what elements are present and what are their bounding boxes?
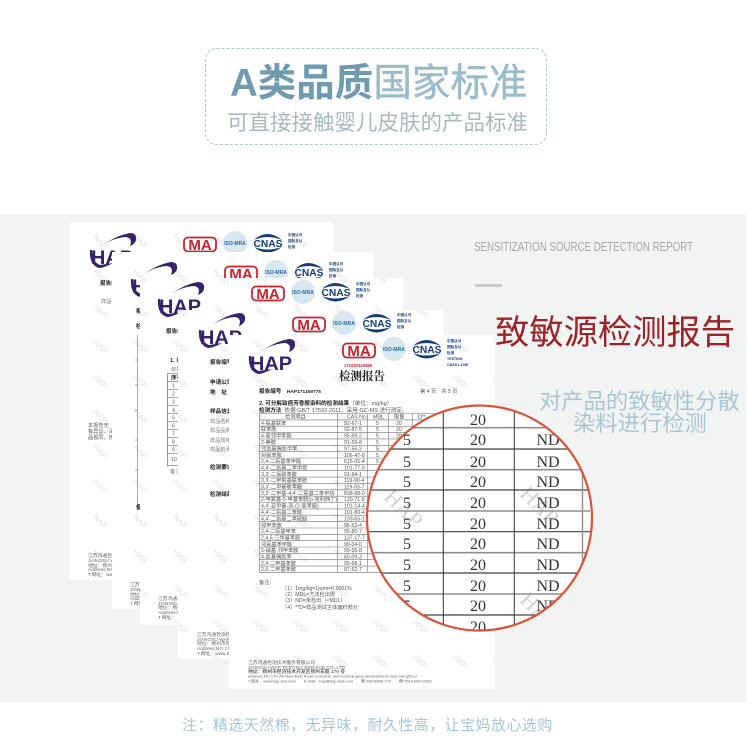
sheet 3 logos: MA [256, 286, 280, 303]
subtitle: 可直接接触婴儿皮肤的产品标准 [227, 111, 528, 135]
header badge [206, 48, 546, 144]
test results table: 3,3'-二甲基-4,4'-二氨基二苯甲烷 [261, 489, 335, 497]
test results table: 2,4-二甲基苯胺 [261, 559, 296, 567]
sheet 1 footer: 地址：扬州市经济技术 [88, 562, 136, 569]
sheet 3 narrow sample table: 9 [172, 448, 175, 454]
sheet 1 logos [90, 231, 303, 269]
magnified watermarks: HAP [515, 481, 564, 530]
sheet 4 footer [197, 631, 264, 657]
test results table: 101-80-4 [344, 510, 365, 516]
magnified grid lines [368, 412, 590, 624]
sheet 4 field labels: 申请公司 [210, 378, 233, 386]
column of results ND: ND [536, 516, 560, 533]
test results table: 5 [376, 453, 379, 459]
test results table: 20 [396, 434, 402, 440]
magnified watermarks [384, 486, 558, 614]
sheet 2 logos: 国际互认 [329, 267, 344, 272]
sheet 3 narrow sample table: 8 [172, 440, 175, 446]
sheet 5 footer: 地址：扬州市经济技术开发区扬州东路 170 号 [248, 668, 345, 675]
sheet 3 narrow sample table: 5 [172, 416, 175, 422]
table notes: （1）1mg/kg=1ppm=0.0001% [282, 585, 352, 592]
test results table: 3,3'-二甲氧基联苯胺 [261, 476, 307, 484]
sheet 1 side text: 样品名称 [101, 297, 122, 305]
sheet 3 logos: 国际互认 [356, 287, 371, 292]
sheet 2 logos [131, 260, 344, 298]
test results table: 91-59-8 [344, 440, 362, 446]
sheet 2 footer [130, 581, 197, 607]
column of limit values 20: 20 [470, 454, 486, 471]
test results table: MDL [373, 414, 384, 420]
sheet 1 logos: 中国认可 [288, 232, 303, 237]
column of results ND: ND [536, 557, 560, 574]
sheet 3 narrow sample table: 序号 [171, 374, 183, 382]
magnifier ring [367, 406, 592, 630]
column of limit values 5 [404, 434, 410, 602]
test results table: 101-77-9 [344, 466, 365, 472]
bottom note: 注：精选天然棉，无异味，耐久性高，让宝妈放心选购 [182, 717, 553, 734]
short accent bar [475, 284, 502, 287]
test results table: 邻氨基偶氮甲苯 [261, 444, 297, 452]
sheet 5 logos: ISO-MRA [383, 347, 405, 353]
sheet 2 footer: T.网址： [130, 600, 148, 607]
column of results ND: ND [536, 495, 560, 512]
test results table: CAS No. [347, 414, 367, 420]
sheet 1 logos: ISO-MRA [224, 241, 246, 247]
table notes: （4）**D=样品测试主体面料部分 [282, 603, 358, 611]
sheet 1 side text: 品视同，核 [88, 433, 114, 441]
sheet 3 narrow sample table: 型 [219, 582, 224, 590]
sheet 5 logos: HAP [250, 354, 292, 375]
test results table: 5-硝基-邻甲苯胺 [261, 546, 298, 554]
magnifier: enlarged table [360, 400, 592, 640]
column of limit values 20: 20 [470, 557, 486, 574]
sheet 5 footer: 江苏鸿通检测技术服务有限公司 [248, 659, 315, 666]
sheet 3 narrow sample table: 3 [172, 400, 175, 406]
sheet 4 footer: 江苏鸿通检测技术服务有限公司 [197, 631, 264, 638]
sheet 2 side rule and labels: 检 [136, 322, 142, 330]
sheet 4 logos: 检测 [397, 324, 405, 329]
sheet 1 footer: 江苏鸿通检测技术服务有限公司 [88, 552, 155, 559]
sheet 2 footer: 江苏鸿通检测技术服务有限公司 [130, 581, 197, 588]
test results table: 120-71-8 [344, 497, 365, 503]
test results table: 3,3'-二氯联苯胺 [261, 470, 297, 478]
report meta: 2. 可分解致癌芳香胺染料的检测结果（单位：mg/kg） [259, 399, 392, 407]
sheet 4 field labels: 样品名称 [210, 417, 231, 425]
sheet 1 logos: MA [188, 237, 212, 254]
sheet 4 field labels: 样品信息 [210, 407, 233, 415]
magnified watermarks: HAP [379, 484, 428, 533]
test results table: 2-萘胺 [261, 438, 276, 446]
test results table [259, 412, 445, 573]
column of limit values 5: 5 [403, 578, 411, 595]
test results table: 92-87-5 [344, 427, 362, 433]
sheet 1 side text: 报告编号 [100, 279, 123, 287]
magnified watermarks: HAP [515, 587, 564, 636]
sheet 5 logos [249, 337, 468, 375]
sheet 4 footer: JIANGSU WAP TESTING [197, 637, 252, 643]
sheet 5 logos: CNAS L4780 [447, 363, 468, 367]
test results table: 2-甲氧基-5-甲基苯胺(p-克利西丁) [261, 495, 337, 503]
sheet 5 logos: MA [347, 343, 371, 360]
english caption: SENSITIZATION SOURCE DETECTION REPORT [474, 240, 693, 254]
report meta: 第 4 页 共 5 页 [420, 387, 457, 395]
test results table: 99-55-8 [344, 548, 362, 554]
report stack [70, 222, 495, 689]
test results table: 95-69-2 [344, 434, 362, 440]
column of results ND: ND [536, 536, 560, 553]
test results table: 5 [376, 446, 379, 452]
test results table: 4,4'-亚甲基-双-(2-氯苯胺) [261, 502, 319, 510]
sheet 1 footer [88, 552, 155, 578]
test results table: 139-65-1 [344, 516, 365, 522]
column of limit values 5: 5 [403, 432, 411, 449]
sheet 1 footer: Address:NO.170 [88, 567, 124, 573]
test results table: 95-53-4 [344, 523, 362, 529]
sheet 4 logos [199, 311, 412, 349]
test results table: 邻氨基苯甲醚 [261, 540, 293, 548]
sheet 5 logos: CNAS [412, 345, 442, 356]
sheet 3 narrow sample table: 报告编号 [166, 327, 189, 335]
column of limit values 20: 20 [470, 578, 486, 595]
column of limit values 20: 20 [470, 412, 486, 429]
sheet 5 logos: 国际互认 [447, 344, 462, 349]
test results table: 邻甲苯胺 [261, 521, 282, 529]
sheet 2 footer: Address:NO [130, 596, 156, 602]
column of results ND [536, 432, 560, 615]
test results table: 4,4'-二氨基二苯硫醚 [261, 514, 308, 522]
sheet 3 narrow sample table: 备注 [170, 467, 180, 475]
report meta [259, 387, 457, 414]
column of limit values 5: 5 [403, 557, 411, 574]
report meta: 报告编号 [259, 387, 282, 395]
sheet 5 footer: JIANGSU WAP TESTING SERVICE CO.,LTD [248, 665, 346, 671]
sheet 3 narrow sample table: 2 [172, 392, 175, 398]
sheet 3 footer: Address:NO [158, 610, 184, 616]
test results table: 检测项目 [285, 412, 306, 420]
sheet 2 logos: 检测 [329, 273, 337, 278]
sheet 3 narrow sample table: 10 [171, 457, 177, 463]
sheet 3 narrow sample table: 依据 [171, 365, 181, 373]
sheet 1 logos: 检测 [288, 244, 296, 249]
sheet 5 logos: 中国认可 [447, 338, 462, 343]
sheet 4 field labels: 检测要求 [210, 463, 233, 471]
test results table: 92-67-1 [344, 421, 362, 427]
sheet 1 logos: CNAS [254, 239, 283, 250]
sheet 2 side rule and labels [135, 307, 142, 511]
report sheet 2 [112, 252, 373, 609]
column of limit values 20: 20 [470, 516, 486, 533]
sheet 2 footer: JIANGSU WAP [130, 587, 163, 593]
test results table: 5 [376, 459, 379, 465]
sheet 3 footer: 地址：扬州市 [158, 604, 187, 611]
test results table: 3,3'-二甲基联苯胺 [261, 482, 302, 490]
report number in red: 171020340088 [344, 363, 373, 368]
sheet 1 side text: 本报告无 [88, 421, 109, 429]
test results table: 2,4,5-三甲基苯胺 [261, 534, 300, 542]
sheet 4 field labels: 样品检测 [210, 445, 231, 453]
column of results ND: ND [536, 432, 560, 449]
column of limit values 20: 20 [470, 495, 486, 512]
test results table: 4-氨基联苯 [261, 419, 286, 427]
column of results ND: ND [536, 454, 560, 471]
sheet 4 logos: HAP [200, 328, 242, 349]
column of limit values 20: 20 [470, 619, 486, 636]
sheet 2 logos: ISO-MRA [265, 270, 287, 276]
test results table: 838-88-0 [344, 491, 365, 497]
report title: 检测报告 [339, 369, 385, 383]
sheet 3 logos [158, 280, 371, 318]
column of results ND: ND [536, 598, 560, 615]
sheet 3 narrow sample table: 1 [172, 384, 175, 390]
sheet 4 logos: ISO-MRA [333, 321, 355, 327]
sheet 3 footer: 江苏鸿通检测技术服务有限公司 [158, 595, 225, 602]
sheet 1 footer: JIANGSU WAP TESTING [88, 558, 143, 564]
report sheet 5 front [229, 335, 495, 689]
sheet 4 field labels: 检测结果 [210, 490, 233, 498]
sheet 1 footer: T.网址：www.hap [88, 571, 126, 578]
test results table: 95-80-7 [344, 529, 362, 535]
test results table: 4-氨基偶氮苯 [261, 552, 292, 560]
test results table: 4-氯邻甲苯胺 [261, 432, 292, 440]
test results table: 90-04-0 [344, 542, 362, 548]
sheet 3 narrow sample table: 6 [172, 424, 175, 430]
column of limit values 20: 20 [470, 432, 486, 449]
grey band background [0, 214, 746, 702]
sheet 5 logos: TESTING [447, 357, 463, 361]
sheet 5 footer [248, 659, 433, 684]
sheet 4 field labels: 样品规格 [210, 436, 232, 444]
sheet 1 side text [88, 279, 123, 441]
table notes: （3）ND=未检出（<MDL） [282, 596, 346, 604]
report sheet 4 [178, 310, 443, 659]
test results table: 119-93-7 [344, 484, 364, 490]
sheet 4 field labels [210, 358, 233, 498]
test results table: 91-94-1 [344, 472, 362, 478]
test results table: 2,6-二甲基苯胺 [261, 565, 296, 573]
sheet 2 logos: MA [229, 266, 253, 283]
sheet 3 footer: T.网址： [158, 614, 176, 621]
test results table: 106-47-8 [344, 453, 365, 459]
sheet 3 footer [158, 595, 225, 621]
test results table: 615-05-4 [344, 459, 365, 465]
sheet 3 footer: JIANGSU WAP [158, 601, 191, 607]
column of limit values 5: 5 [403, 454, 411, 471]
table notes: 备注： [259, 578, 275, 586]
sheet 4 logos: 国际互认 [397, 318, 412, 323]
description line 1: 对产品的致敏性分散 [539, 389, 740, 414]
sheet 3 narrow sample table: 1. 表 [170, 356, 182, 364]
table notes [259, 578, 358, 611]
test results table: 2,4-二氨基苯甲醚 [261, 457, 302, 465]
column of results ND: ND [536, 578, 560, 595]
sheet 1 logos: 国际互认 [288, 238, 303, 243]
column of limit values 20: 20 [470, 536, 486, 553]
sheet 3 logos: HAP [159, 297, 201, 318]
sheet 3 logos: CNAS [322, 288, 351, 299]
sheet 4 logos: MA [297, 317, 321, 334]
sheet 4 logos: CNAS [362, 319, 392, 330]
sheet 3 narrow sample table: 4 [172, 408, 175, 414]
sheet 1 side text: 有异议，请 [88, 427, 114, 435]
test results table: 95-68-1 [344, 561, 362, 567]
test results table: 119-90-4 [344, 478, 364, 484]
column of limit values 20 [470, 414, 486, 630]
test results table: 5 [376, 427, 379, 433]
sheet 5 footer: Address:NO.170 Wenhua East Road economic and technological development zone,YangZhou [248, 674, 417, 678]
table notes: （2）MDL=方法检出限 [282, 590, 335, 598]
dashed frame [206, 48, 546, 144]
sheet 4 footer: 地址：扬州市经 [197, 640, 231, 647]
description line 2: 染料进行检测 [573, 411, 707, 436]
sheet 1 logos: HAP [91, 248, 133, 269]
report sheet 3 [140, 278, 403, 625]
column of limit values 5: 5 [403, 495, 411, 512]
test results table: 4,4'-二氨基二苯醚 [261, 508, 303, 516]
sheet 4 field labels: 报告编号 [210, 358, 233, 366]
column of limit values 20: 20 [470, 598, 486, 615]
report heading: 致敏源检测报告 [495, 314, 735, 352]
test results table: 限量 [394, 412, 404, 420]
test results table: 20 [396, 421, 402, 427]
column of limit values 5: 5 [403, 598, 411, 615]
column of limit values 5: 5 [403, 474, 411, 491]
sheet 2 logos: 中国认可 [329, 261, 344, 266]
column of results ND: ND [536, 474, 560, 491]
sheet 3 logos: 检测 [356, 293, 364, 298]
test results table: D** [418, 414, 426, 420]
test results table: 2,4-二氨基甲苯 [261, 527, 296, 535]
sheet 2 logos: HAP [132, 277, 174, 298]
column of limit values 5: 5 [403, 536, 411, 553]
test results table: 60-09-3 [344, 554, 362, 560]
sheet 2 side rule and labels: 报 [136, 307, 142, 315]
sheet 5 footer: T.网址：www.hap-test.com E-mail：hap@hap-test.com ☎ 400-6688-776 ☎ 0514-89712561 [248, 678, 433, 684]
test results table: 20 [396, 427, 402, 433]
test results table: 137-17-7 [344, 536, 365, 542]
sheet 3 logos: ISO-MRA [292, 290, 314, 296]
test results table: 87-62-7 [344, 567, 362, 573]
report meta: 检测方法 依据 GB/T 17592-2011，采用 GC-MS 进行测定。 [259, 406, 408, 414]
sheet 3 logos: 中国认可 [356, 281, 371, 286]
column of limit values 20: 20 [470, 474, 486, 491]
test results table: 5 [376, 434, 379, 440]
sheet 5 logos: 检测 [447, 350, 455, 355]
sheet 4 footer: Address:NO.170 [197, 646, 233, 652]
test results table: 97-56-3 [344, 446, 362, 452]
sheet 3 narrow sample table: 7 [172, 432, 175, 438]
test results table: 4,4'-二氨基二苯甲烷 [261, 464, 308, 472]
report meta: HAP171169775 [287, 389, 321, 395]
sheet 2 logos: CNAS [294, 268, 324, 279]
sheet 4 field labels: 样品品牌 [210, 426, 231, 434]
sheet 4 footer: T.网址：www.hap [197, 650, 235, 657]
test results table: 5 [376, 440, 379, 446]
test results table: 5 [376, 421, 379, 427]
sheet 2 side rule and labels: 备 [136, 503, 142, 511]
report sheet 1 [70, 222, 333, 580]
column of limit values 5: 5 [403, 516, 411, 533]
test results table: 对氯苯胺 [261, 451, 282, 459]
test results table: 联苯胺 [261, 425, 277, 433]
sheet 3 narrow sample table [166, 327, 224, 590]
test results table: 101-14-4 [344, 504, 365, 510]
sheet 2 footer: 地址：扬州市 [130, 591, 159, 598]
sheet 4 logos: 中国认可 [397, 312, 412, 317]
sheet 4 field labels: 地 址 [210, 388, 227, 396]
title: A类品质国家标准 [230, 62, 527, 105]
